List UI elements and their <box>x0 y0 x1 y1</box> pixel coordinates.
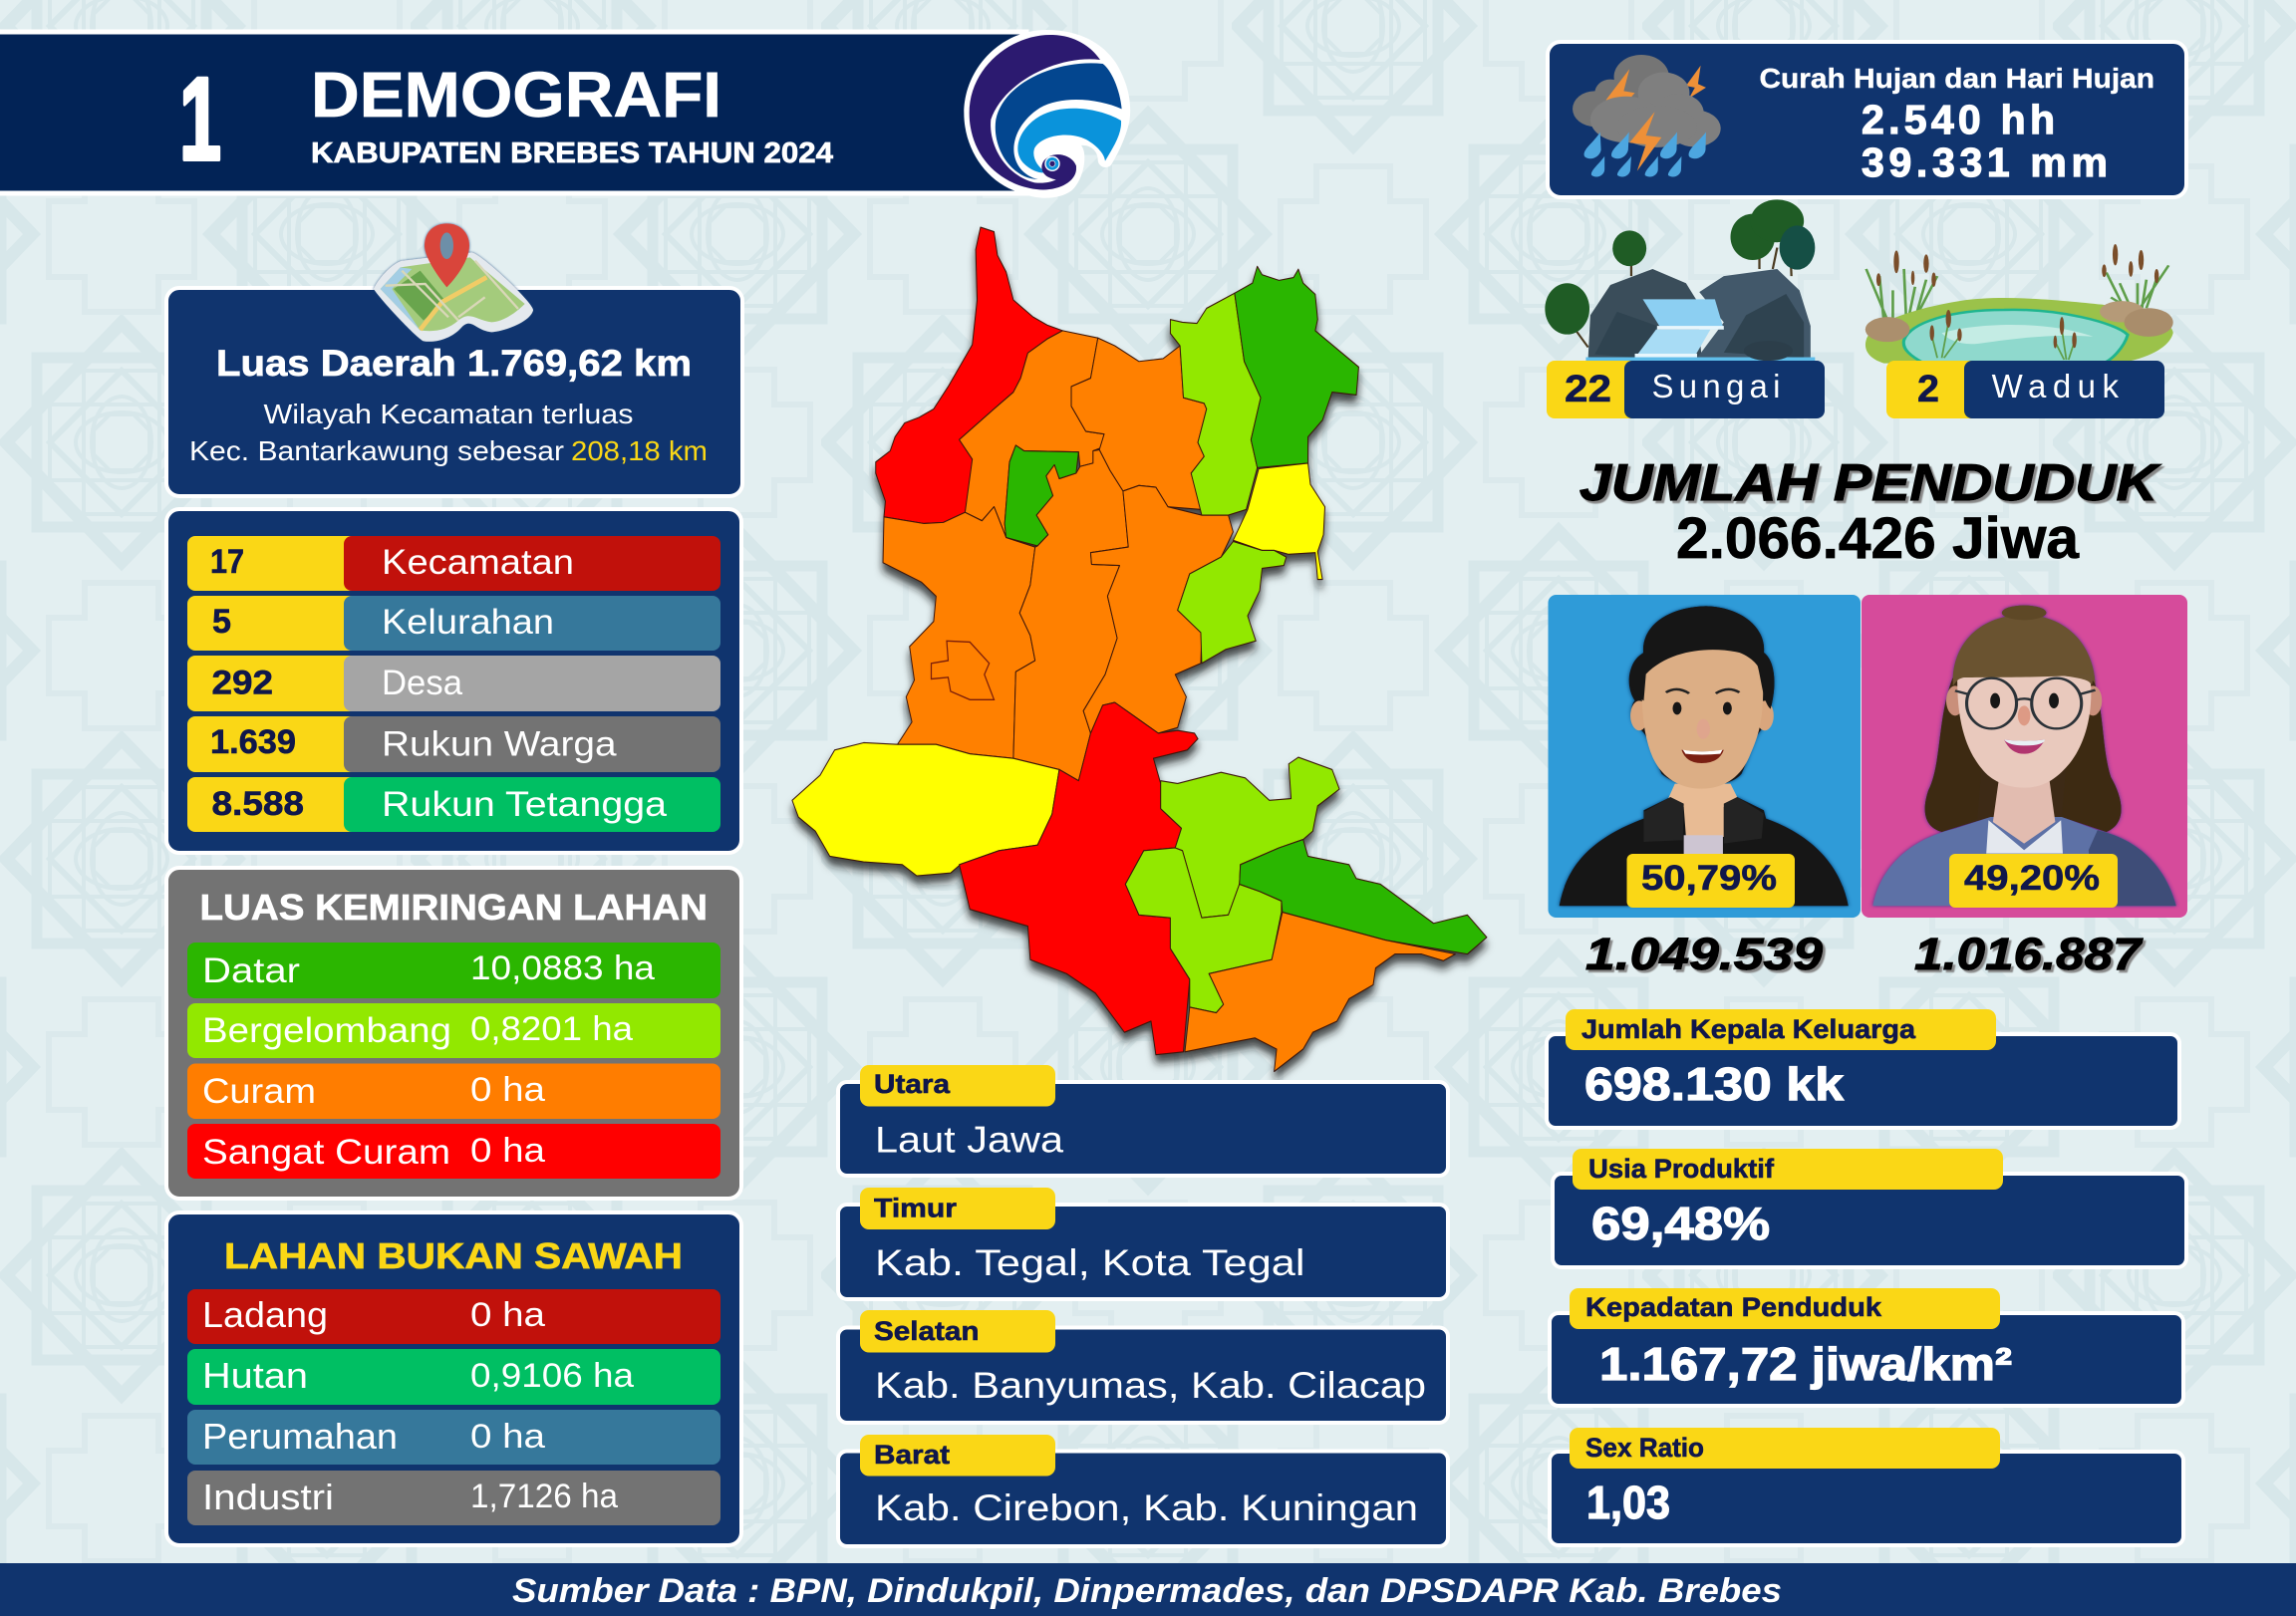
badge: persentase laki-laki: 50,79% <box>1641 859 1777 898</box>
row: datar: 10,0883 ha <box>470 949 655 987</box>
icon: ministry logo <box>964 30 1130 198</box>
tab: sex ratio <box>1570 1428 2000 1469</box>
badge: persentase perempuan: 49,20% <box>1964 859 2100 898</box>
panel: batas selatan <box>838 1310 1448 1423</box>
text: kec. bantarkawung <box>189 435 708 466</box>
value: sex ratio: 1,03 <box>1586 1477 1670 1528</box>
row: hutan: Hutan <box>202 1355 308 1396</box>
value: kepala keluarga: 698.130 kk <box>1584 1058 1844 1110</box>
icon: waterfall <box>1545 199 1815 362</box>
row: kelurahan: 5 <box>212 603 231 641</box>
row: industri: 1,7126 ha <box>470 1478 618 1515</box>
panel: batas barat <box>838 1435 1448 1546</box>
badge: sungai: 22 <box>1565 369 1611 410</box>
row: perumahan: Perumahan <box>202 1416 398 1457</box>
badge: sungai: Sungai <box>1652 368 1780 404</box>
tab: usia produktif: Usia Produktif <box>1588 1154 1775 1184</box>
heading: luas daerah: Luas Daerah 1.769,62 km <box>216 343 692 384</box>
row: rukun tetangga <box>187 777 720 832</box>
value: kepadatan penduduk: 1.167,72 jiwa/km² <box>1599 1338 2012 1390</box>
illustration: male avatar <box>1560 606 1849 906</box>
icon: pond <box>1866 244 2173 364</box>
male population count: 1.049.539 <box>1585 929 1823 979</box>
heading: luas kemiringan lahan: LUAS KEMIRINGAN LAHAN <box>199 887 708 928</box>
row: rukun warga: Rukun Warga <box>382 725 617 763</box>
row: datar: Datar <box>202 951 300 990</box>
subtitle: KABUPATEN BREBES TAHUN 2024 <box>311 137 833 169</box>
tab: selatan <box>860 1310 1055 1353</box>
row: sangat curam: Sangat Curam <box>202 1133 450 1172</box>
row: bergelombang <box>187 1003 720 1058</box>
panel: kepadatan penduduk <box>1550 1288 2183 1406</box>
panel: luas daerah <box>166 223 742 496</box>
row: industri: Industri <box>202 1477 334 1517</box>
icon: map with location pin <box>374 223 533 342</box>
text: hari hujan value: 2.540 hh <box>1862 97 2055 142</box>
row: perumahan <box>187 1410 720 1465</box>
row: ladang: Ladang <box>202 1294 328 1335</box>
title: DEMOGRAFI <box>311 59 721 131</box>
badge: persentase perempuan <box>1949 854 2118 908</box>
icon: storm cloud <box>1573 55 1721 176</box>
badge: persentase laki-laki <box>1626 854 1795 908</box>
panel: usia produktif <box>1553 1149 2186 1267</box>
panel: curah hujan <box>1548 42 2186 197</box>
row: desa <box>187 656 720 711</box>
tab: sex ratio: Sex Ratio <box>1585 1433 1704 1463</box>
row: rukun warga: 1.639 <box>210 723 296 761</box>
tab: jumlah kepala keluarga: Jumlah Kepala Keluarga <box>1581 1014 1916 1044</box>
badge: waduk: 2 <box>1917 369 1939 410</box>
text: kec. bantarkawung: 208,18 km <box>571 435 708 466</box>
row: kelurahan <box>187 596 720 651</box>
tab: timur <box>860 1188 1055 1229</box>
row: curam: Curam <box>202 1072 316 1111</box>
badge: sungai <box>1547 361 1825 418</box>
illustration: female avatar <box>1872 606 2176 906</box>
row: kecamatan: 17 <box>210 543 244 581</box>
total population figure: 2.066.426 Jiwa <box>1676 506 2080 571</box>
row: hutan <box>187 1349 720 1405</box>
tab: barat <box>860 1435 1055 1477</box>
card: perempuan <box>1862 595 2187 918</box>
panel: luas kemiringan lahan <box>166 868 741 1199</box>
section number: 1 <box>179 54 221 185</box>
panel: sex ratio <box>1550 1428 2183 1545</box>
text: kab. cirebon: Kab. Cirebon, Kab. Kuningan <box>875 1487 1418 1528</box>
panel: lahan bukan sawah <box>166 1212 741 1545</box>
row: bergelombang: 0,8201 ha <box>470 1010 633 1048</box>
row: perumahan: 0 ha <box>470 1418 545 1456</box>
row: kecamatan <box>187 536 720 591</box>
tab: usia produktif <box>1573 1149 2003 1190</box>
row: desa: Desa <box>382 664 463 702</box>
tab: kepadatan penduduk <box>1570 1288 2000 1329</box>
row: rukun tetangga: 8.588 <box>211 785 304 823</box>
heading: jumlah penduduk: JUMLAH PENDUDUK <box>1579 454 2161 512</box>
footer: sumber data <box>0 1563 2296 1616</box>
text: kab. tegal: Kab. Tegal, Kota Tegal <box>875 1242 1305 1283</box>
value: usia produktif: 69,48% <box>1591 1198 1770 1249</box>
row: sangat curam <box>187 1124 720 1179</box>
row: kecamatan: Kecamatan <box>382 543 574 582</box>
row: desa: 292 <box>211 664 273 701</box>
row: hutan: 0,9106 ha <box>470 1357 634 1395</box>
row: sangat curam: 0 ha <box>470 1132 545 1170</box>
female population count: 1.016.887 <box>1914 929 2144 979</box>
card: laki-laki <box>1549 595 1861 918</box>
row: ladang: 0 ha <box>470 1296 545 1334</box>
tab: jumlah kepala keluarga <box>1566 1009 1996 1050</box>
badge: waduk <box>1886 361 2164 418</box>
choropleth map of Kabupaten Brebes <box>792 227 1487 1071</box>
row: curam <box>187 1064 720 1119</box>
row: datar <box>187 943 720 998</box>
badge: waduk: Waduk <box>1992 368 2119 404</box>
tab: kepadatan penduduk: Kepadatan Penduduk <box>1585 1292 1882 1322</box>
panel: wilayah administrasi <box>166 509 741 853</box>
panel: jumlah kepala keluarga <box>1547 1009 2179 1128</box>
row: rukun tetangga: Rukun Tetangga <box>382 785 668 824</box>
text: kab. banyumas: Kab. Banyumas, Kab. Cilacap <box>875 1365 1426 1406</box>
text: curah hujan dan hari hujan: Curah Hujan dan Hari Hujan <box>1760 63 2154 94</box>
row: ladang <box>187 1289 720 1344</box>
row: industri <box>187 1471 720 1525</box>
row: curam: 0 ha <box>470 1071 545 1109</box>
text: laut jawa: Laut Jawa <box>875 1120 1063 1160</box>
row: kelurahan: Kelurahan <box>382 603 554 642</box>
heading: lahan bukan sawah: LAHAN BUKAN SAWAH <box>224 1235 683 1276</box>
footer: sumber data: Sumber Data : BPN, Dindukpil, Dinpermades, dan DPSDAPR Kab. Brebes <box>512 1572 1782 1610</box>
header banner <box>0 32 1026 193</box>
text: kec. bantarkawung: Kec. Bantarkawung sebesar <box>189 435 564 466</box>
tab: utara: Utara <box>874 1069 951 1099</box>
panel: batas timur <box>838 1188 1448 1299</box>
tab: barat: Barat <box>874 1440 950 1470</box>
row: bergelombang: Bergelombang <box>202 1011 451 1050</box>
tab: selatan: Selatan <box>874 1316 979 1346</box>
tab: timur: Timur <box>874 1194 958 1223</box>
tab: utara <box>860 1065 1055 1106</box>
text: wilayah kecamatan terluas: Wilayah Kecamatan terluas <box>263 399 634 429</box>
panel: batas utara <box>838 1065 1448 1176</box>
text: curah hujan value: 39.331 mm <box>1862 139 2108 185</box>
row: rukun warga <box>187 716 720 772</box>
